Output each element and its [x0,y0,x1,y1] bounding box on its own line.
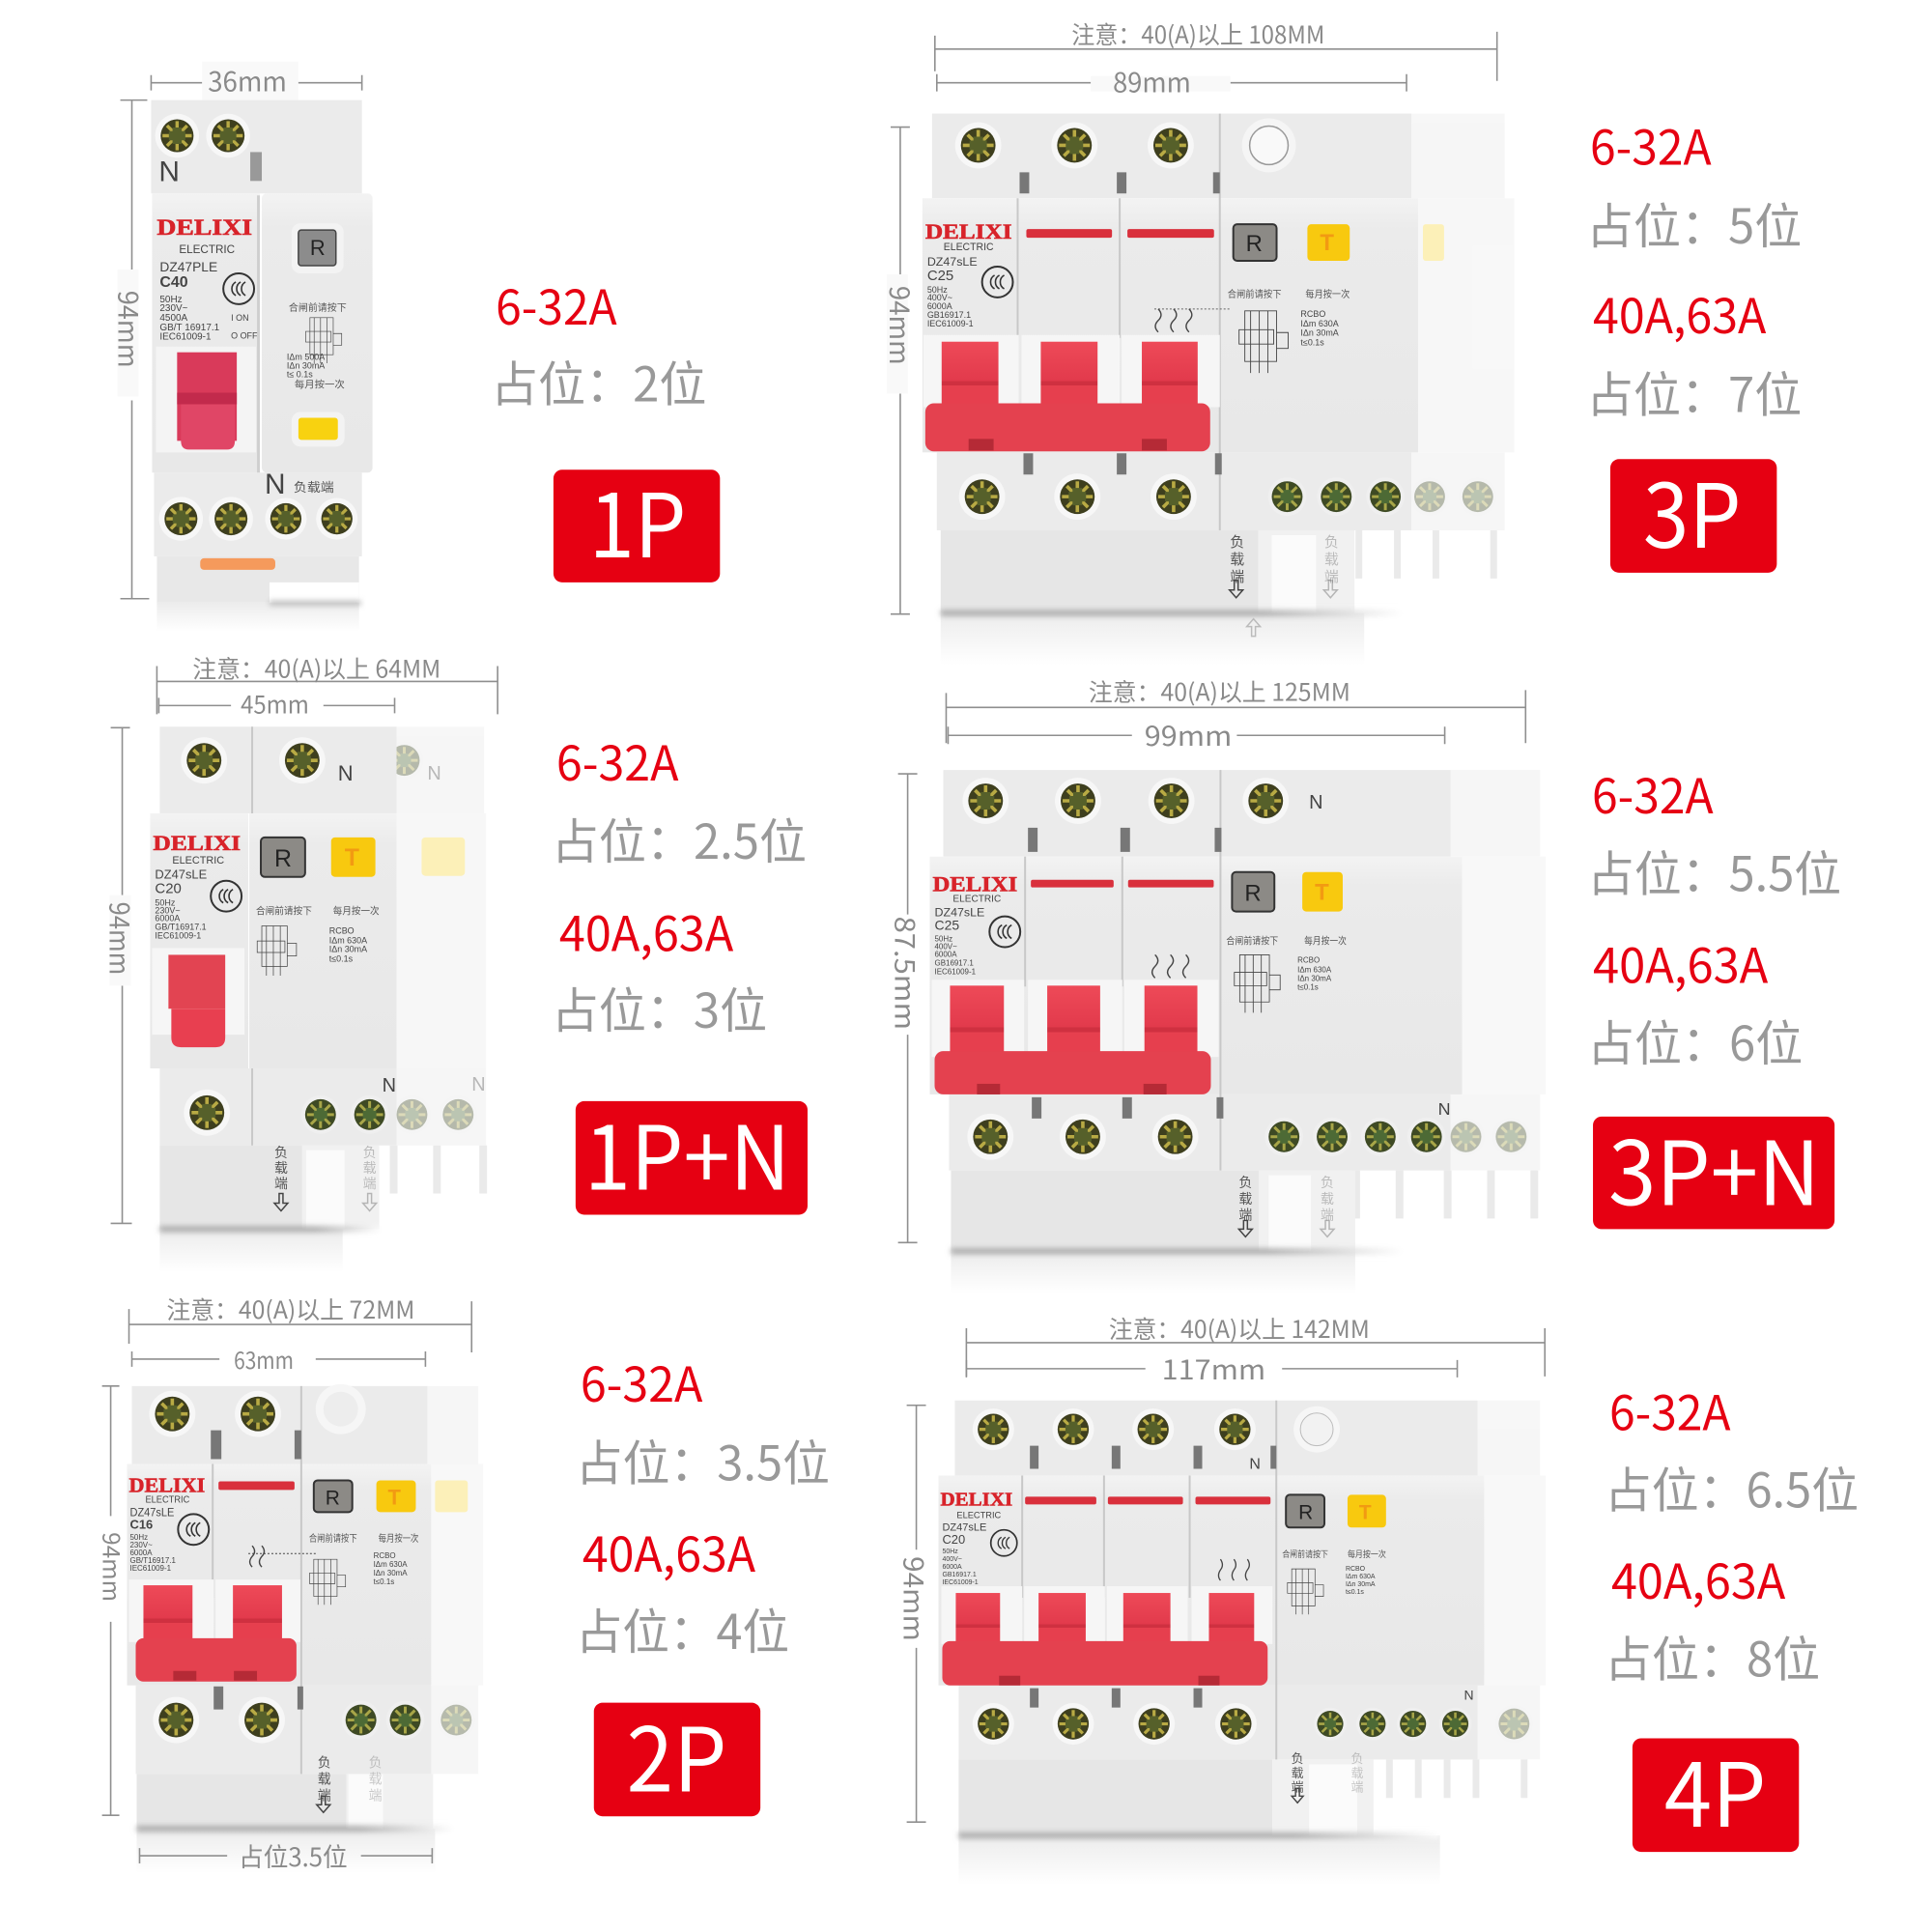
product: 3P+N breaker: C25 [935,918,959,933]
dimension: width 89mm: 89mm [1113,63,1191,101]
product: 3P breaker: 合闸前请按下 [1228,286,1282,300]
product: 2P breaker: GB/T16917.1 [130,1556,176,1565]
handle [156,347,256,452]
product: 4P breaker: ELECTRIC [956,1510,1002,1520]
product: 1P breaker [151,100,373,632]
button: R [314,1480,353,1512]
button: T: T [388,1485,402,1509]
product: 3P+N breaker: N [1309,792,1322,813]
product: 3P breaker: IEC61009-1 [927,319,974,328]
product: 3P+N breaker: IEC61009-1 [935,967,977,976]
product: 3P breaker: C25 [927,268,953,284]
dimension: height 94mm: 94mm [881,286,920,365]
spec text: 占位：2.5位 [552,804,807,873]
logo: DELIXI: DELIXI [153,831,241,855]
product: 3P breaker: DZ47sLE [927,255,978,269]
product: 1P breaker: C40 [159,274,188,291]
dimension: height 94mm: 94mm [97,1532,130,1602]
button: T: T [1320,230,1334,256]
product: 1P+N breaker: DZ47sLE [155,867,208,882]
product: 1P+N breaker: N [383,1075,396,1096]
logo: DELIXI: DELIXI [156,215,252,240]
spec text: 40A,63A [1611,1544,1786,1613]
button: T [1307,224,1350,261]
faded extension module [385,726,487,1194]
spec text: 6-32A [496,270,617,339]
dimension note: 142MM: 注意：40(A)以上 142MM [1109,1311,1370,1346]
product: 3P+N breaker: IΔm 630A [1297,965,1332,974]
product: 3P breaker: 负载端 [1227,534,1247,586]
spec text [1587,758,1841,1075]
product: 1P+N breaker [150,726,487,1272]
product: 3P breaker: 6000A [927,301,952,311]
product: 1P breaker: GB/T 16917.1 [159,323,220,333]
product: 3P+N breaker: 6000A [935,950,957,958]
product: 3P+N breaker: 合闸前请按下 [1226,932,1278,947]
product: 1P+N breaker: t≤0.1s [329,953,354,963]
product: 2P breaker: IEC61009-1 [130,1564,172,1573]
product: 3P breaker: 每月按一次 [1305,286,1350,300]
product: 2P breaker: 每月按一次 [379,1530,418,1545]
button: R: R [1298,1501,1313,1523]
product: 3P breaker: 400V~ [927,293,952,302]
spec text: 占位：3.5位 [576,1425,830,1494]
spec text: 6-32A [556,725,679,795]
product: 1P breaker: IΔm 500A [287,353,325,362]
badge: 4P: 4P [1664,1725,1766,1853]
product: 1P breaker: 每月按一次 [295,377,345,391]
dimension: 占位3.5位: 占位3.5位 [239,1836,348,1874]
dimension note: 64MM [156,650,497,714]
product: 4P breaker: 合闸前请按下 [1282,1548,1328,1560]
button: T [292,412,345,446]
faded extension module [1355,114,1515,579]
product: 1P breaker: 4500A [159,313,188,324]
product: 2P breaker: 6000A [130,1548,153,1557]
button: T: T [1359,1501,1372,1523]
panel: 1P [110,62,720,632]
dimension: width 99mm [948,716,1445,754]
product: 1P breaker: N [158,156,180,187]
product: 1P+N breaker: 合闸前请按下 [256,903,312,918]
product: 1P+N breaker: RCBO [329,926,355,936]
product: 3P+N breaker: 50Hz [935,934,952,943]
product: 3P+N breaker: IΔn 30mA [1297,974,1332,982]
product: 3P breaker: RCBO [1300,309,1325,319]
product: 1P+N breaker: 负载端 [360,1146,380,1192]
spec text: 占位：6.5位 [1605,1452,1859,1521]
dimension: width 117mm [966,1350,1458,1388]
product: 1P breaker: IΔn 30mA [287,361,325,371]
product: 4P breaker: RCBO [1346,1566,1366,1573]
product: 3P breaker: 50Hz [927,285,948,295]
badge: 1P+N: 1P+N [584,1089,790,1216]
faded extension module [1352,770,1546,1218]
dimension note: 108MM: 注意：40(A)以上 108MM [1071,16,1324,51]
product: 4P breaker: 每月按一次 [1348,1548,1386,1560]
dimension: width 63mm: 63mm [234,1342,294,1376]
product: 4P breaker: N [1249,1457,1261,1473]
product: 1P breaker: t≤ 0.1s [287,370,313,380]
button: R [292,223,344,273]
dimension note: 64MM: 注意：40(A)以上 64MM [192,650,440,685]
dimension: width 63mm [132,1342,425,1376]
button: R [1234,224,1277,261]
spec text: 40A,63A [1593,927,1769,997]
product: 2P breaker: C16 [130,1517,153,1531]
dimension: height 94mm: 94mm [110,291,149,368]
spec text: 6-32A [1609,1376,1731,1445]
dimension: height 94mm: 94mm [895,1556,934,1641]
button: R: R [274,845,292,872]
product: 1P breaker: O OFF [231,331,258,341]
product: 3P+N breaker: 负载端 [1318,1176,1337,1224]
spec text: 占位：3位 [552,973,767,1042]
product: 2P breaker: 230V~ [130,1541,153,1549]
logo: DELIXI: DELIXI [129,1473,205,1496]
product: 2P breaker: RCBO [374,1551,396,1560]
product: 1P breaker: 负载端 [294,477,334,496]
spec text: 占位：8位 [1605,1622,1820,1691]
badge: 2P [594,1690,760,1817]
product: 4P breaker: 负载端 [1348,1751,1366,1795]
dimension: height 87.5mm [887,774,925,1242]
button: R [1232,872,1274,912]
product: 1P+N breaker: N [471,1074,486,1095]
dimension: height 94mm [101,727,140,1223]
product: 4P breaker [938,1401,1546,1885]
panel: 4P [895,1311,1859,1885]
product: 1P+N breaker: 230V~ [155,906,181,916]
spec text: 6-32A [1590,109,1712,179]
dimension: height 94mm [881,128,920,614]
product: 3P+N breaker: ELECTRIC [952,895,1001,905]
dimension: width 45mm: 45mm [241,686,309,721]
faded extension module [1386,1401,1546,1798]
badge: 3P+N: 3P+N [1608,1103,1820,1231]
spec text: 占位：6位 [1587,1006,1803,1075]
product: 3P+N breaker [930,770,1546,1293]
product: 2P breaker: IΔm 630A [374,1560,408,1569]
product: 1P breaker: 50Hz [159,295,183,305]
product: 3P+N breaker: GB16917.1 [935,958,974,967]
product: 2P breaker: IΔn 30mA [374,1569,408,1577]
product: 4P breaker: 负载端 [1289,1751,1307,1795]
dimension: width 89mm [937,63,1406,101]
product: 1P breaker: N [265,469,286,500]
dimension: width 45mm [158,686,395,721]
product: 3P breaker: IΔm 630A [1300,319,1339,328]
spec text [491,270,706,415]
spec text [552,725,807,1042]
product: 2P breaker [128,1384,483,1873]
logo: DELIXI: DELIXI [940,1489,1012,1510]
dimension note: 125MM [946,673,1525,743]
product: 2P breaker: 50Hz [130,1533,148,1542]
dimension: 占位3.5位 [139,1836,432,1874]
dimension: height 94mm [110,100,149,599]
product: 3P+N breaker: 400V~ [935,942,957,951]
product: 3P breaker [923,114,1515,666]
button: T [1348,1494,1386,1527]
dimension: height 94mm [895,1406,934,1822]
product: 3P+N breaker: t≤0.1s [1297,982,1319,991]
product: 1P breaker: ELECTRIC [179,242,235,256]
button: R: R [326,1487,340,1509]
logo: DELIXI: DELIXI [925,219,1012,243]
product: 4P breaker: 400V~ [942,1556,962,1563]
dimension: height 87.5mm: 87.5mm [887,917,925,1030]
product: 3P+N breaker: 负载端 [1236,1176,1255,1224]
product: 3P+N breaker: RCBO [1297,955,1320,964]
product: 1P breaker: DZ47PLE [159,259,217,274]
product: 2P breaker: 负载端 [366,1755,385,1804]
panel: 2P [97,1292,830,1874]
product: 4P breaker: N [1464,1688,1474,1703]
spec text: 占位：4位 [576,1594,789,1663]
badge: 4P [1633,1725,1799,1853]
product: 3P breaker: GB16917.1 [927,310,971,320]
product: 1P breaker: IEC61009-1 [159,332,212,343]
handles and bar [941,1586,1272,1686]
product: 1P breaker: I ON [231,313,249,323]
dimension note: 142MM [966,1311,1545,1377]
product: 1P+N breaker: 6000A [155,914,180,923]
dimension: height 94mm [97,1386,130,1815]
logo: DELIXI: DELIXI [933,872,1017,896]
product: 2P breaker: 合闸前请按下 [309,1530,357,1545]
product: 4P breaker: IΔn 30mA [1346,1581,1376,1588]
button: R: R [310,236,326,260]
dimension note: 108MM [935,16,1497,81]
dimension: width 117mm: 117mm [1162,1350,1265,1388]
handles and bar [923,335,1220,451]
badge: 3P: 3P [1643,446,1741,574]
dimension note: 72MM [129,1292,471,1352]
product: 1P+N breaker: ELECTRIC [172,855,224,867]
dimension note: 125MM: 注意：40(A)以上 125MM [1089,673,1350,708]
product: 3P breaker: IΔn 30mA [1300,328,1339,338]
spec text: 占位：5.5位 [1587,837,1841,906]
product: 2P breaker: DZ47sLE [130,1505,174,1519]
dimension: width 99mm: 99mm [1145,716,1232,754]
product: 3P+N breaker: DZ47sLE [935,906,984,920]
button: T [377,1480,415,1512]
product: 4P breaker: DZ47sLE [942,1521,986,1533]
dimension note: 72MM: 注意：40(A)以上 72MM [166,1292,414,1326]
spec text: 40A,63A [1593,278,1767,348]
button: R [1286,1494,1324,1527]
badge: 2P: 2P [627,1690,726,1817]
spec text: 占位：5位 [1586,188,1802,258]
product: 4P breaker: 50Hz [942,1548,958,1555]
spec text [1605,1376,1859,1691]
product: 4P breaker: C20 [942,1532,965,1547]
button: R: R [1244,881,1262,907]
product: 1P+N breaker: IEC61009-1 [155,930,201,940]
product: 3P+N breaker: 每月按一次 [1304,932,1347,947]
spec text: 40A,63A [582,1517,756,1586]
product: 2P breaker: ELECTRIC [145,1494,189,1505]
spec text: 6-32A [1592,758,1714,828]
product: 1P+N breaker: 负载端 [271,1146,291,1192]
product: 1P+N breaker: 50Hz [155,898,176,908]
product: 1P+N breaker: GB/T16917.1 [155,923,207,932]
product: 4P breaker: GB16917.1 [942,1572,977,1578]
faded extension module [427,1386,483,1774]
spec text: 6-32A [581,1347,703,1416]
product: 1P+N breaker: 每月按一次 [333,903,380,918]
badge: 3P [1610,446,1776,574]
product: 3P breaker: 负载端 [1321,534,1342,586]
button: T [1302,872,1343,912]
product: 2P breaker: t≤0.1s [374,1577,394,1586]
dimension: height 94mm: 94mm [101,902,140,975]
product: 4P breaker: IΔm 630A [1346,1574,1376,1580]
button: R: R [1246,231,1263,257]
product: 4P breaker: IEC61009-1 [942,1579,979,1586]
panel: 3P+N [887,673,1841,1293]
handles and bar [932,980,1218,1094]
handles and bar [129,1579,300,1682]
product: 1P+N breaker: N [427,763,441,784]
spec text [576,1347,830,1663]
button: T [331,838,376,877]
product: 2P breaker: 负载端 [315,1755,334,1804]
spec text: 40A,63A [559,895,734,965]
product: 3P+N breaker: N [1438,1099,1451,1119]
product: 1P breaker: 230V~ [159,303,188,314]
product: 3P breaker: t≤0.1s [1300,338,1324,348]
product: 1P+N breaker: IΔn 30mA [329,944,367,953]
product: 1P+N breaker: IΔm 630A [329,935,367,945]
product: 1P breaker: 合闸前请按下 [289,299,347,314]
button: R [261,838,305,877]
panel: 3P [881,16,1802,666]
handle [152,948,244,1047]
spec text: 占位：7位 [1586,356,1802,426]
product: 1P+N breaker: C20 [155,881,182,897]
spec text: 占位：2位 [491,346,706,415]
button: T: T [1315,880,1329,906]
button: T: T [345,844,359,871]
product: 1P+N breaker: N [338,761,354,785]
spec text [1586,109,1802,426]
dimension: width 36mm [151,62,362,100]
product: 3P breaker: ELECTRIC [944,242,994,253]
panel: 1P+N [101,650,808,1272]
badge: 1P: 1P [589,456,686,583]
badge: 1P [554,456,720,583]
product: 4P breaker: 6000A [942,1564,962,1571]
product: 4P breaker: t≤0.1s [1346,1589,1364,1596]
dimension: width 36mm: 36mm [208,62,287,100]
